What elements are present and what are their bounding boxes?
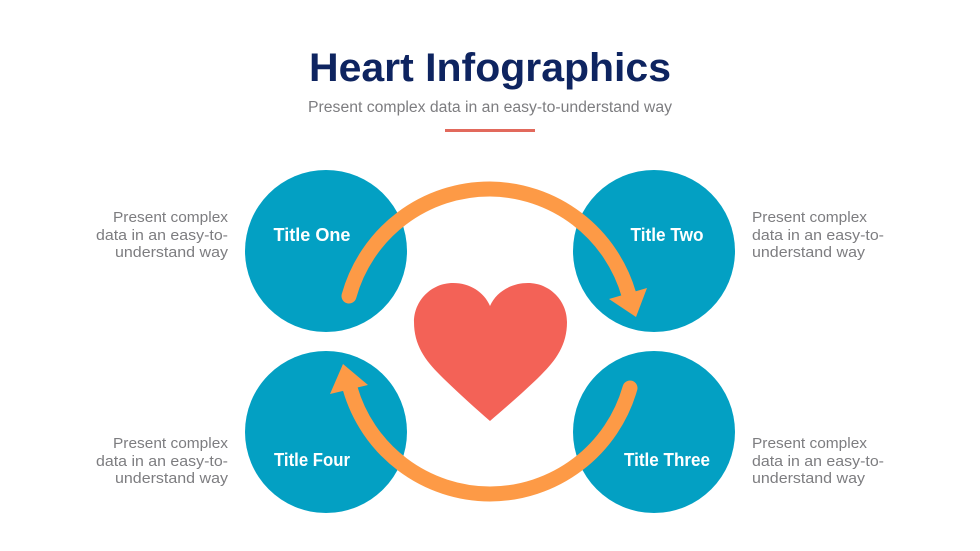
text block: title four description [96, 435, 229, 487]
panel: title one circle [245, 170, 407, 332]
text block: title three description: Present complex [752, 435, 868, 452]
arrow: top clockwise [349, 189, 647, 317]
panel: title three circle [573, 351, 735, 513]
text block: title three description [752, 435, 884, 487]
text block: title three description: data in an easy-to- [752, 453, 884, 470]
arrow: bottom clockwise [330, 364, 630, 494]
text block: title four description: understand way [115, 470, 229, 487]
text block: title three description: understand way [752, 470, 866, 487]
subtitle: Present complex data in an easy-to-understand way [308, 99, 672, 116]
title underline [445, 129, 535, 132]
text block: title two description: data in an easy-to- [752, 227, 884, 244]
panel: title two circle [573, 170, 735, 332]
text block: title four description: data in an easy-to- [96, 453, 228, 470]
text block: title two description: understand way [752, 244, 866, 261]
text block: title one description: data in an easy-to- [96, 227, 228, 244]
text block: title one description [96, 209, 229, 261]
text block: title one description: understand way [115, 244, 229, 261]
text block: title four description: Present complex [113, 435, 229, 452]
icon: heart [414, 283, 567, 421]
text block: title one description: Present complex [113, 209, 229, 226]
text block: title two description [752, 209, 884, 261]
text block: title two description: Present complex [752, 209, 868, 226]
panel: title three circle: Title Three [624, 449, 710, 470]
panel: title one circle: Title One [274, 224, 350, 245]
panel: title four circle [245, 351, 407, 513]
panel: title two circle: Title Two [630, 224, 704, 245]
panel: title four circle: Title Four [274, 449, 350, 470]
title: Heart Infographics [309, 46, 671, 90]
